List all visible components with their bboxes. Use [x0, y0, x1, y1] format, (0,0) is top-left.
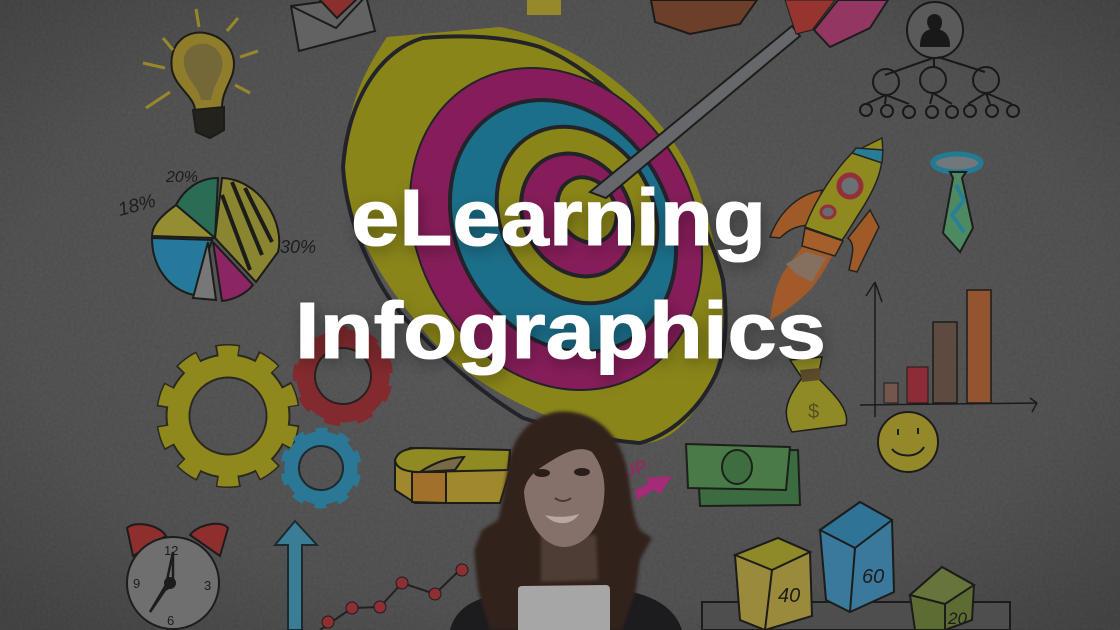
bar chart	[860, 282, 1037, 417]
icon: stacked boxes: 40	[778, 585, 800, 607]
line chart	[320, 564, 468, 630]
icon: large yellow gear	[154, 342, 302, 490]
pie chart	[116, 169, 316, 301]
pie percentage labels	[116, 169, 316, 257]
icon: banknotes	[686, 444, 800, 506]
neck	[541, 535, 598, 582]
body	[450, 588, 682, 630]
target blue ring	[405, 59, 721, 393]
title line 1: eLearning	[351, 173, 766, 262]
icon: alarm clock: 6	[167, 613, 174, 628]
icon: brown wallet	[651, 0, 757, 34]
icon: 3D pie wedge	[395, 448, 510, 503]
target centre	[546, 167, 628, 253]
nose	[555, 498, 571, 501]
icon: alarm clock: 3	[204, 578, 211, 593]
icon: alarm clock	[127, 524, 228, 629]
icon: "up" arrow	[620, 456, 672, 500]
target yellow paint	[344, 27, 723, 443]
photo: woman	[450, 412, 682, 630]
pie percentage labels: 20%	[165, 169, 198, 186]
tablet	[518, 585, 610, 630]
icon: "up" arrow: UP	[620, 456, 649, 482]
target olive ring	[465, 97, 689, 333]
target inner magenta	[499, 133, 655, 297]
icon: stacked boxes: 60	[862, 566, 884, 588]
icon: necktie	[933, 154, 981, 252]
icon: stacked boxes: 20	[947, 609, 967, 628]
icon: small yellow tag	[527, 0, 561, 15]
title	[295, 173, 826, 375]
pie percentage labels: 18%	[116, 191, 158, 221]
pie percentage labels: 30%	[280, 237, 316, 257]
icon: envelope	[291, 0, 375, 51]
icon: alarm clock: 12	[164, 543, 178, 558]
icon: red gear	[288, 321, 398, 431]
title line 2: Infographics	[295, 286, 826, 375]
target outer outline	[343, 36, 726, 443]
icon: money bag: $	[808, 401, 819, 423]
icon: dart arrow	[590, 0, 888, 198]
hair	[474, 412, 652, 630]
face	[524, 449, 604, 547]
target	[343, 15, 760, 443]
icon: rocket	[770, 138, 883, 320]
icon: smiley face	[878, 412, 938, 472]
eyes	[534, 469, 550, 477]
mouth	[545, 514, 579, 523]
icon: organisation chart	[860, 2, 1019, 118]
icon: blue up arrow	[275, 521, 317, 630]
icon: alarm clock: 9	[133, 576, 140, 591]
icon: money bag	[786, 357, 847, 432]
icon: light bulb	[143, 9, 258, 138]
target magenta ring	[352, 15, 760, 443]
icon: blue gear	[278, 425, 364, 511]
icon: stacked boxes	[702, 502, 1010, 630]
